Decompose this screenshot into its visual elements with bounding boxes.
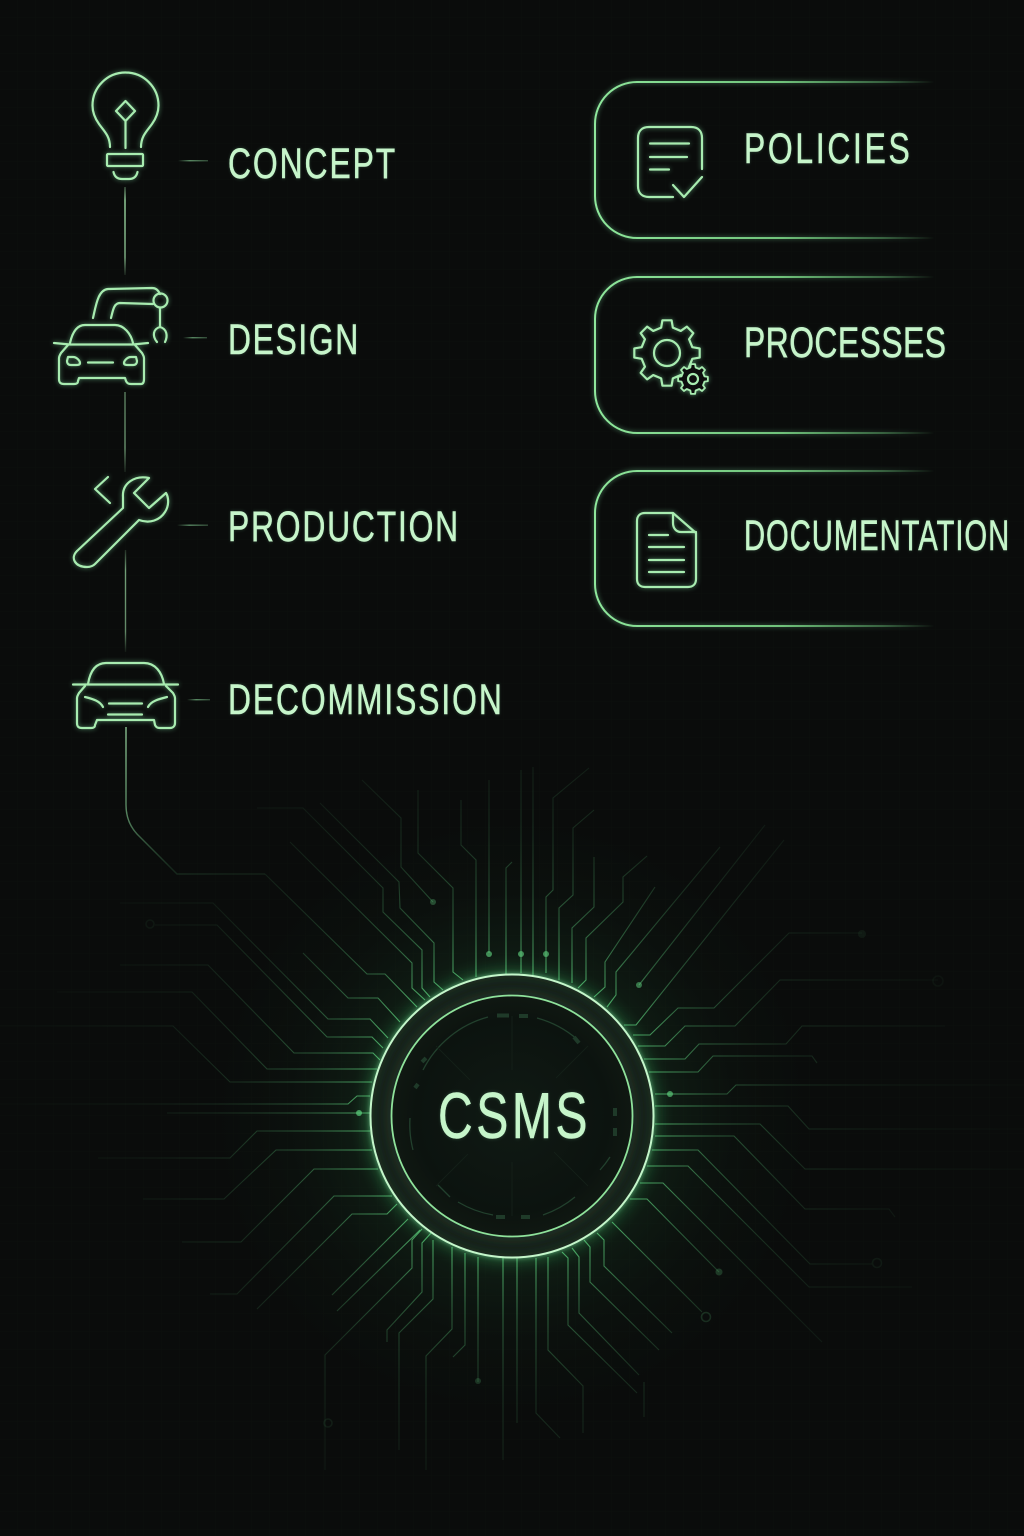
panel: processes [595,277,946,433]
connector: design to production [124,392,126,472]
icon: robot arm and car [54,288,168,384]
icon: policy checklist [638,127,702,197]
icon: document [637,513,696,587]
connector: production to decommission [124,550,126,652]
label: documentation: DOCUMENTATION [744,511,1009,559]
icon: car [73,663,178,728]
stage: production: PRODUCTION [228,503,458,551]
label: policies: POLICIES [744,125,910,173]
panel: CSMS hub [212,816,812,1416]
segmented dial [410,1016,615,1217]
icon: gears [634,320,708,394]
label: processes: PROCESSES [744,319,946,367]
label: CSMS: CSMS [438,1080,587,1153]
connector: concept to design [124,187,126,275]
inner ring [392,996,632,1236]
outer ring [370,974,654,1258]
circuit traces radiating from CSMS [0,767,1024,1470]
stage: design: DESIGN [228,316,358,364]
icon: wrench [74,477,168,567]
stage: decommission: DECOMMISSION [228,676,502,724]
stage connector to hub [126,727,265,874]
panel: documentation [595,471,1009,626]
panel: policies [595,82,935,238]
stage: concept: CONCEPT [228,140,395,188]
icon: light bulb [92,72,158,179]
